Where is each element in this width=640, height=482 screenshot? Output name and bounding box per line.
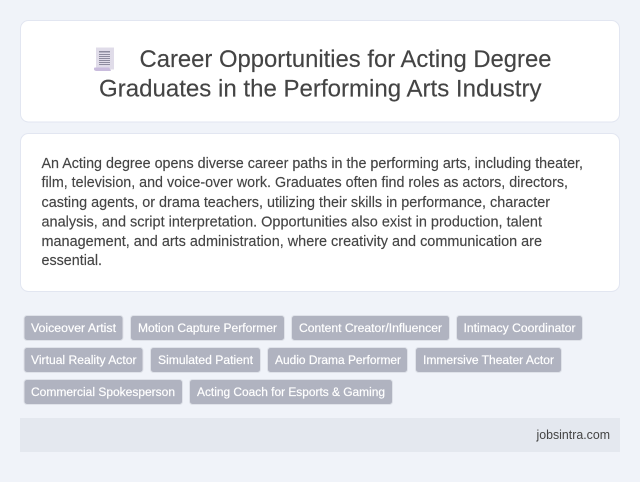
tag: Virtual Reality Actor: Virtual Reality Actor bbox=[31, 353, 136, 367]
tag: Virtual Reality Actor bbox=[24, 348, 143, 372]
tag: Acting Coach for Esports & Gaming: Acting Coach for Esports & Gaming bbox=[197, 385, 385, 399]
panel: header bbox=[20, 20, 620, 122]
footer bbox=[20, 418, 620, 452]
tag: Intimacy Coordinator bbox=[456, 316, 582, 340]
text block: description: analysis, and script interpretation. Opportunities also exist in production, talent bbox=[42, 214, 543, 230]
tag: Content Creator/Influencer: Content Creator/Influencer bbox=[299, 321, 442, 335]
tag: Audio Drama Performer bbox=[268, 348, 408, 372]
tag: Acting Coach for Esports & Gaming bbox=[190, 380, 392, 404]
tag: Commercial Spokesperson: Commercial Spokesperson bbox=[31, 385, 175, 399]
tag: Motion Capture Performer: Motion Capture Performer bbox=[138, 321, 277, 335]
text block: description: An Acting degree opens diverse career paths in the performing arts, including theater, bbox=[42, 155, 583, 172]
tag: Immersive Theater Actor bbox=[416, 348, 562, 372]
tag: Voiceover Artist: Voiceover Artist bbox=[31, 321, 117, 335]
tag: Immersive Theater Actor: Immersive Theater Actor bbox=[423, 353, 554, 367]
text block: description bbox=[42, 155, 583, 269]
text block: description: essential. bbox=[42, 252, 102, 269]
tag: Motion Capture Performer bbox=[130, 316, 284, 340]
tag: Simulated Patient: Simulated Patient bbox=[158, 353, 254, 367]
tag: Voiceover Artist bbox=[24, 316, 123, 340]
text block: description: management, and arts administration, where creativity and communication are bbox=[42, 233, 542, 250]
tag list bbox=[24, 316, 582, 404]
text block: description: casting agents, or drama teachers, utilizing their skills in performance, character bbox=[42, 194, 550, 211]
title: Career Opportunities for Acting Degree bbox=[140, 46, 552, 73]
tag: Intimacy Coordinator: Intimacy Coordinator bbox=[464, 321, 576, 335]
tag: Commercial Spokesperson bbox=[24, 380, 182, 404]
tag: Content Creator/Influencer bbox=[292, 316, 450, 340]
tag: Audio Drama Performer: Audio Drama Performer bbox=[275, 353, 401, 367]
icon: script scroll bbox=[94, 48, 114, 71]
text block: description: film, television, and voice-over work. Graduates often find roles as actors, directors, bbox=[42, 174, 568, 191]
title bbox=[99, 46, 552, 102]
footer: source: jobsintra.com bbox=[536, 427, 610, 442]
panel: description bbox=[20, 134, 620, 292]
tag: Simulated Patient bbox=[150, 348, 260, 372]
title: Graduates in the Performing Arts Industry bbox=[99, 76, 542, 102]
